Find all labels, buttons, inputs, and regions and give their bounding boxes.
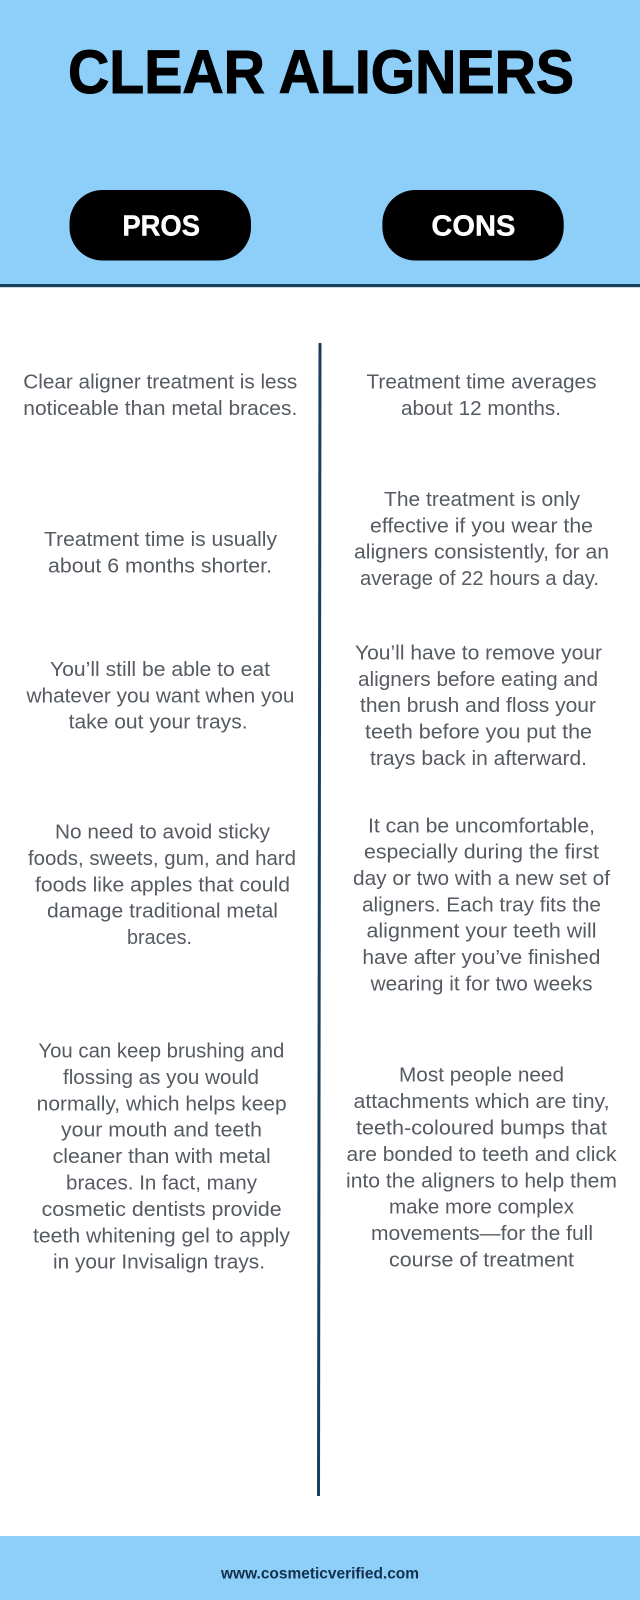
pro 5 text xyxy=(33,1040,291,1274)
con 3 text: trays back in afterward. xyxy=(370,747,587,770)
con 3 text: You’ll have to remove your xyxy=(355,642,602,665)
title: CLEAR ALIGNERS xyxy=(68,38,574,106)
cons pill xyxy=(382,190,564,260)
cons pill: CONS xyxy=(431,210,515,242)
con 3 text xyxy=(355,642,602,770)
pro 5 text: normally, which helps keep xyxy=(37,1092,287,1115)
con 2 text: The treatment is only xyxy=(384,488,581,511)
pro 4 text: damage traditional metal xyxy=(47,900,278,923)
con 4 text: day or two with a new set of xyxy=(353,867,610,890)
con 2 text: effective if you wear the xyxy=(370,515,593,538)
con 2 text: aligners consistently, for an xyxy=(354,541,609,564)
pros pill xyxy=(70,190,251,260)
con 5 text: teeth-coloured bumps that xyxy=(356,1116,607,1139)
con 5 text: attachments which are tiny, xyxy=(354,1090,610,1113)
con 5 text: into the aligners to help them xyxy=(346,1169,617,1192)
pro 5 text: teeth whitening gel to apply xyxy=(33,1224,291,1247)
con 5 text: make more complex xyxy=(389,1196,575,1219)
pro 4 text xyxy=(28,821,296,949)
con 1 text: about 12 months. xyxy=(401,397,561,420)
con 4 text: especially during the first xyxy=(364,841,599,864)
footer website: www.cosmeticverified.com xyxy=(220,1565,419,1582)
con 5 text: are bonded to teeth and click xyxy=(346,1143,617,1166)
con 3 text: aligners before eating and xyxy=(358,668,598,691)
con 4 text: It can be uncomfortable, xyxy=(368,814,595,837)
con 3 text: then brush and floss your xyxy=(360,694,596,717)
con 5 text xyxy=(346,1064,617,1271)
pro 4 text: No need to avoid sticky xyxy=(55,821,271,844)
con 5 text: movements—for the full xyxy=(371,1222,593,1245)
pro 1 text: Clear aligner treatment is less xyxy=(23,370,297,393)
pro 1 text: noticeable than metal braces. xyxy=(23,397,297,420)
con 5 text: course of treatment xyxy=(389,1248,574,1271)
pro 5 text: cleaner than with metal xyxy=(53,1145,271,1168)
pro 5 text: flossing as you would xyxy=(63,1066,259,1089)
pro 3 text xyxy=(25,658,294,734)
con 4 text: alignment your teeth will xyxy=(366,920,596,943)
pro 5 text: in your Invisalign trays. xyxy=(53,1251,265,1274)
con 5 text: Most people need xyxy=(399,1064,564,1087)
pro 1 text xyxy=(23,370,297,420)
con 4 text: aligners. Each tray fits the xyxy=(362,893,601,916)
pros pill: PROS xyxy=(122,210,200,242)
header bottom rule xyxy=(0,284,640,287)
con 4 text: wearing it for two weeks xyxy=(370,972,593,995)
pro 5 text: cosmetic dentists provide xyxy=(42,1198,282,1221)
footer band xyxy=(0,1536,640,1600)
pro 2 text xyxy=(44,528,278,577)
con 2 text xyxy=(354,488,609,590)
con 3 text: teeth before you put the xyxy=(365,720,592,744)
header band xyxy=(0,0,640,285)
pro 3 text: You’ll still be able to eat xyxy=(50,658,270,681)
pro 5 text: You can keep brushing and xyxy=(38,1040,284,1063)
pro 4 text: foods like apples that could xyxy=(35,873,290,896)
pro 3 text: whatever you want when you xyxy=(25,684,294,707)
pro 4 text: foods, sweets, gum, and hard xyxy=(28,847,296,870)
con 4 text: have after you’ve finished xyxy=(362,946,600,969)
pro 3 text: take out your trays. xyxy=(69,711,248,734)
con 1 text xyxy=(366,370,596,420)
con 2 text: average of 22 hours a day. xyxy=(360,567,599,590)
pro 2 text: about 6 months shorter. xyxy=(48,554,272,577)
pro 4 text: braces. xyxy=(127,926,192,949)
con 4 text xyxy=(353,814,610,995)
pro 2 text: Treatment time is usually xyxy=(44,528,278,551)
pro 5 text: your mouth and teeth xyxy=(61,1119,262,1142)
center divider line xyxy=(317,343,322,1496)
con 1 text: Treatment time averages xyxy=(366,370,596,393)
pro 5 text: braces. In fact, many xyxy=(66,1172,258,1194)
